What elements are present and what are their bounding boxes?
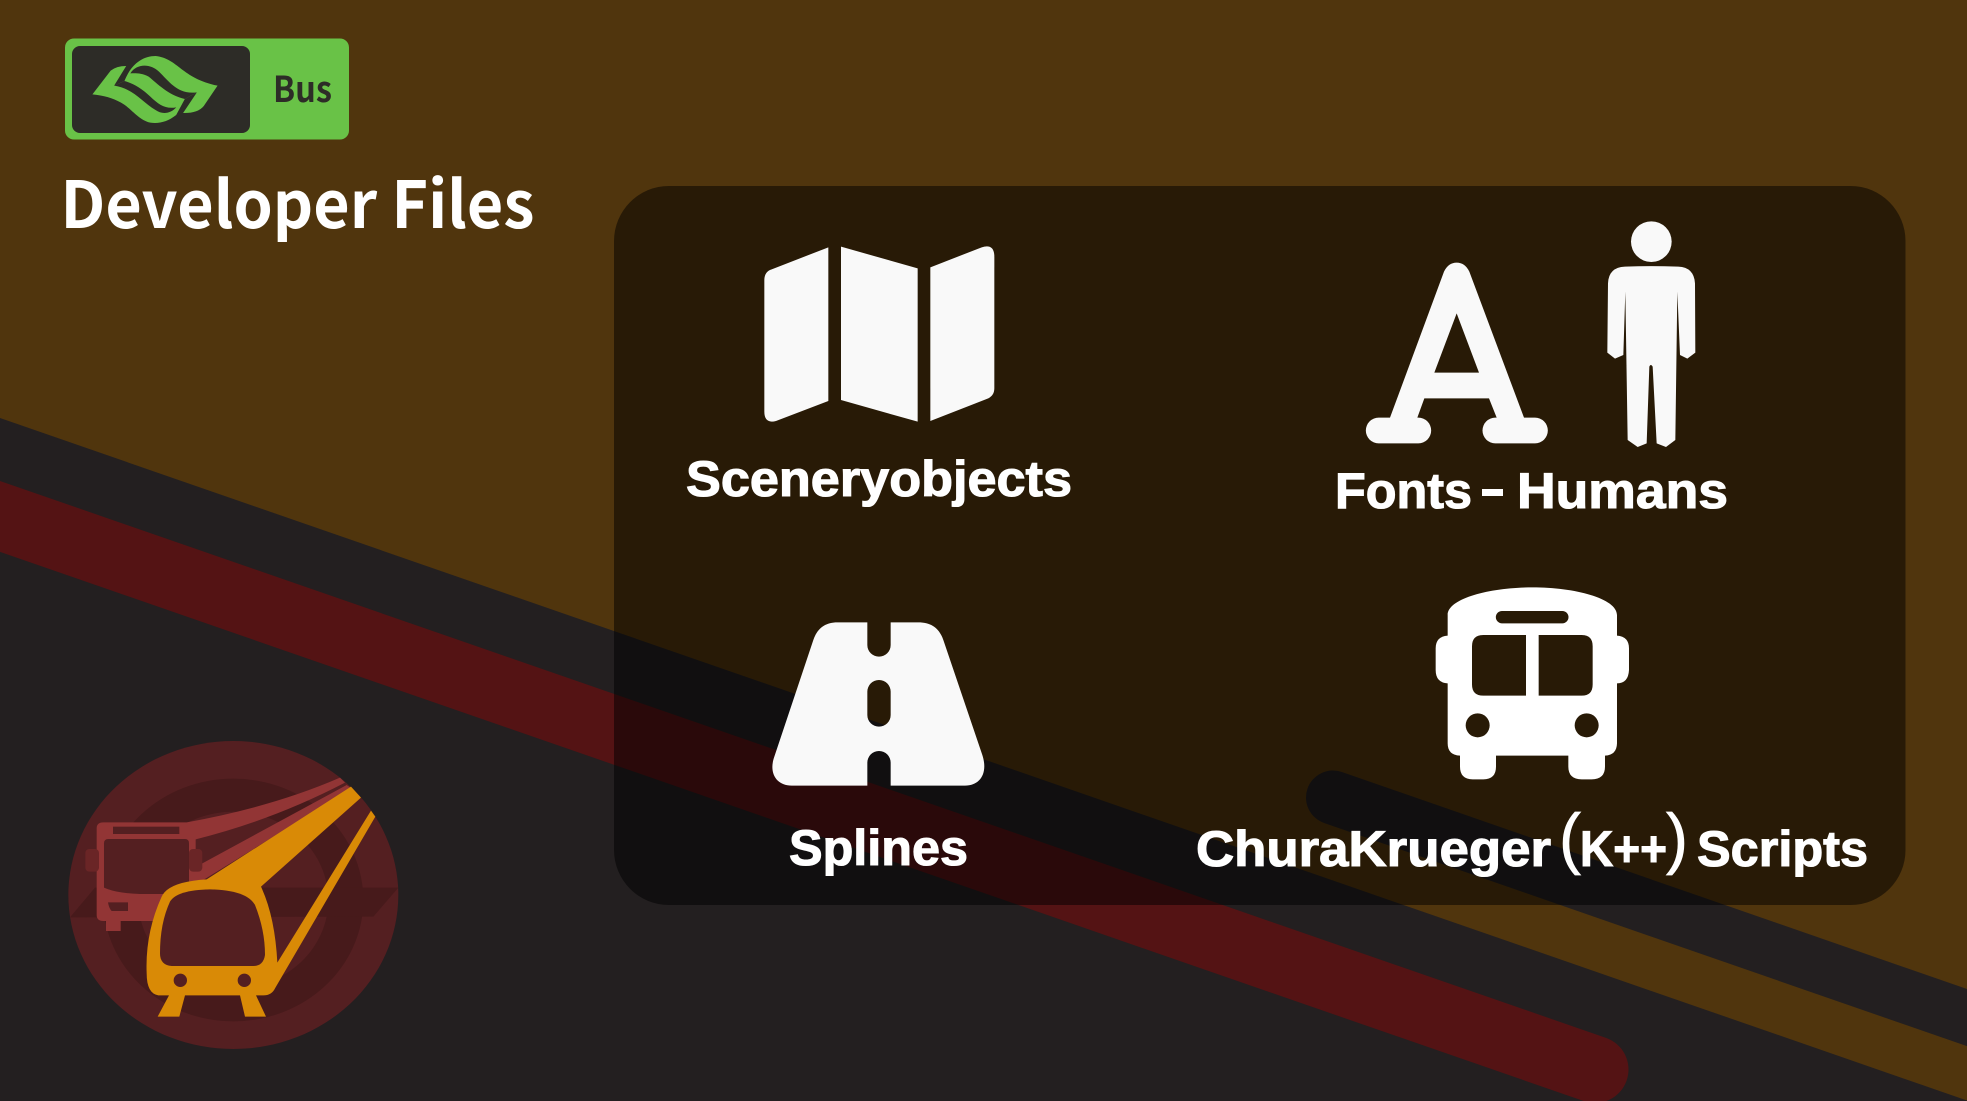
- background: dark diagonal region: [0, 418, 1967, 1101]
- label: Sceneryobjects: Sceneryobjects: [686, 451, 1072, 507]
- label: ChuraKrueger (K++) Scripts: [1196, 800, 1868, 877]
- logo text: Bus: Bus: [273, 61, 332, 113]
- label: Splines: Splines: [789, 820, 968, 876]
- icon: letter A: [1366, 263, 1548, 443]
- icon: red bus with light streaks: [85, 778, 352, 931]
- label: Fonts - Humans: Fonts: [1335, 463, 1472, 519]
- icon: folded map: [764, 246, 994, 422]
- emblem background ellipse: [68, 741, 398, 1049]
- title: Developer Files: [60, 153, 534, 247]
- icon: road: [772, 622, 984, 786]
- emblem: darker bar: [70, 888, 398, 917]
- label: ChuraKrueger (K++) Scripts: K++: [1580, 821, 1667, 877]
- background: red rounded stripe: [0, 506, 1595, 1070]
- label: ChuraKrueger (K++) Scripts: ChuraKrueger: [1196, 821, 1551, 877]
- emblem: bus and tram roundel: [68, 741, 398, 1049]
- emblem: darker ring: [103, 779, 363, 1021]
- label: Fonts - Humans: Humans: [1517, 463, 1728, 519]
- panel: translucent dark card: [614, 186, 1906, 905]
- label: Fonts - Humans: [1335, 463, 1728, 519]
- icon: bus front: [1436, 587, 1629, 779]
- icon: human figure: [1607, 221, 1695, 447]
- label: ChuraKrueger (K++) Scripts: ): [1666, 800, 1688, 876]
- label: ChuraKrueger (K++) Scripts: Scripts: [1697, 821, 1868, 877]
- icon: orange tram with light beam: [147, 787, 375, 1017]
- background: dark rounded stripe: [1333, 798, 1967, 1036]
- logo badge: green Bus badge: [65, 38, 349, 140]
- label: ChuraKrueger (K++) Scripts: (: [1559, 800, 1581, 876]
- icon: leaf wave emblem: [92, 56, 218, 123]
